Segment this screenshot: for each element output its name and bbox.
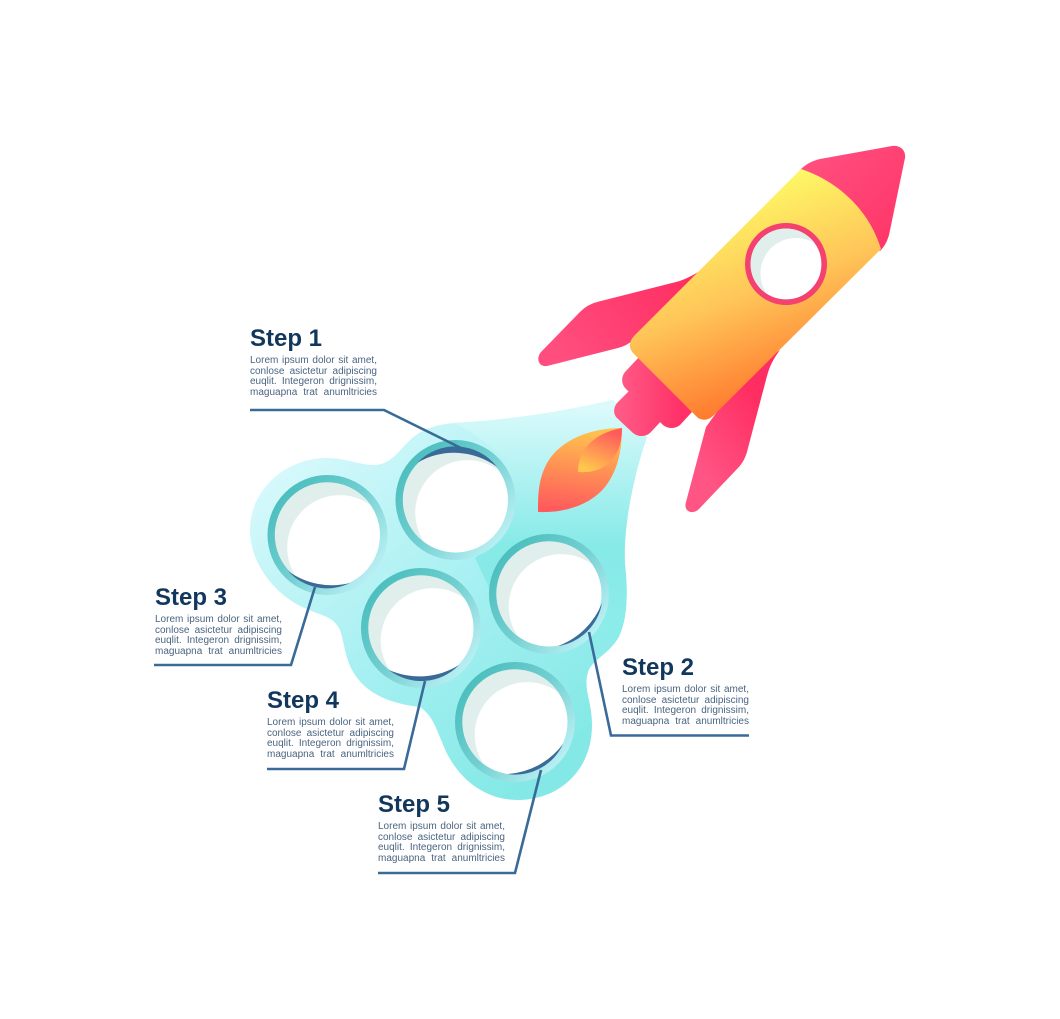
step 3 body: conlose asictetur adipiscing [155,625,282,636]
leader line: step 2 [589,632,749,736]
step 4 body: Lorem ipsum dolor sit amet, [267,717,394,728]
step 3 body: Lorem ipsum dolor sit amet, [155,614,282,625]
step 3 heading: Step 3 [155,584,227,611]
step 5 body: maguapna trat anumltricies [378,853,505,864]
leader line: step 1 [250,410,461,448]
inner nozzle [622,356,692,428]
inner flame [578,428,622,472]
step 2 body: conlose asictetur adipiscing [622,695,749,706]
step 5 body: conlose asictetur adipiscing [378,832,505,843]
step 5 body: Lorem ipsum dolor sit amet, [378,821,505,832]
porthole [748,226,824,302]
step 4 body: euqlit. Integeron drignissim, [267,738,394,749]
right fin [685,350,780,512]
step 1 heading: Step 1 [250,325,322,352]
step 1 body: conlose asictetur adipiscing [250,366,377,377]
step 5 body [378,821,505,864]
leader line: step 4 [267,681,425,769]
step 1 body [250,355,377,398]
rocket body [630,169,881,420]
circle: step 3 [268,475,388,595]
step 2 text [622,654,749,727]
outer nozzle [614,388,664,436]
step 3 body [155,614,282,657]
exhaust cloud [250,400,647,800]
circle: step 4 [361,568,481,688]
circle: step 2 [489,534,609,654]
step 5 text [378,791,505,864]
step 4 text [267,687,394,760]
step 1 body: maguapna trat anumltricies [250,387,377,398]
left fin [538,271,700,366]
step 3 body: maguapna trat anumltricies [155,646,282,657]
step 3 body: euqlit. Integeron drignissim, [155,635,282,646]
circle: step 1 [396,440,516,560]
step 1 body: euqlit. Integeron drignissim, [250,376,377,387]
nose cone [800,146,905,251]
step 2 body [622,684,749,727]
leader line: step 3 [154,587,315,665]
step 2 body: Lorem ipsum dolor sit amet, [622,684,749,695]
step 5 body: euqlit. Integeron drignissim, [378,842,505,853]
step 5 heading: Step 5 [378,791,450,818]
step 1 body: Lorem ipsum dolor sit amet, [250,355,377,366]
leader line: step 5 [378,770,541,873]
rocket flame [538,428,622,512]
step 3 text [155,584,282,657]
step 2 body: maguapna trat anumltricies [622,716,749,727]
step 2 heading: Step 2 [622,654,694,681]
step 4 body: conlose asictetur adipiscing [267,728,394,739]
step 4 heading: Step 4 [267,687,339,714]
exhaust trail and right lobe shading [453,400,647,645]
step 1 text [250,325,377,398]
rocket [538,146,905,512]
step 4 body: maguapna trat anumltricies [267,749,394,760]
step 2 body: euqlit. Integeron drignissim, [622,705,749,716]
step 4 body [267,717,394,760]
circle: step 5 [455,662,575,782]
